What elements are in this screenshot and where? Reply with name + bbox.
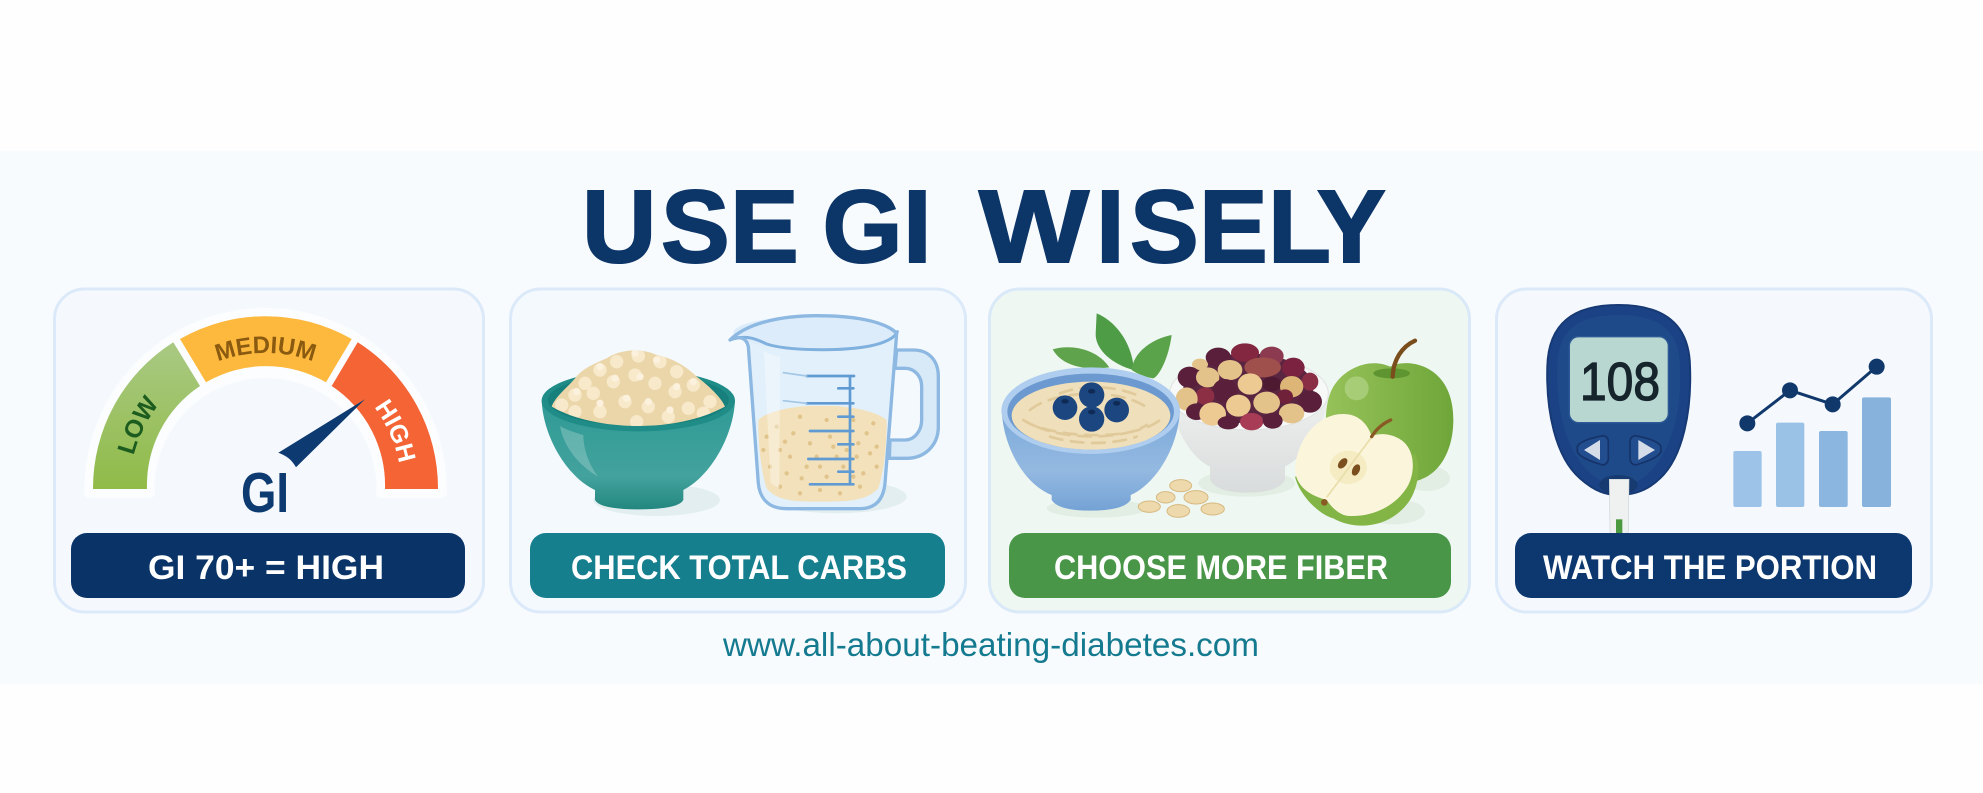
banner: GI 70+ = HIGH: GI 70+ = HIGH	[148, 549, 384, 587]
gauge GI label: GI	[241, 461, 289, 525]
test strip	[1609, 479, 1629, 535]
title: USE GI	[582, 169, 932, 284]
background band	[0, 151, 1983, 684]
banner: GI 70+ = HIGH	[71, 533, 465, 598]
title: ISELY	[1096, 169, 1386, 284]
icon: leaves	[1053, 313, 1172, 378]
banner: check total carbs: CHECK TOTAL CARBS	[571, 549, 907, 587]
meter screen	[1569, 337, 1668, 423]
panel: GI gauge	[53, 288, 485, 614]
panel: more fiber	[990, 289, 1470, 612]
icon: whole green apple	[1326, 341, 1453, 482]
banner: choose more fiber	[1009, 533, 1451, 598]
gauge label: low: LOW	[118, 394, 156, 454]
panel: watch the portion	[1496, 289, 1932, 612]
gauge label: high: HIGH	[375, 398, 416, 462]
gauge segment: low	[93, 342, 200, 489]
banner: check total carbs	[530, 533, 945, 598]
blueberries	[1053, 382, 1129, 432]
banner: choose more fiber: CHOOSE MORE FIBER	[1054, 549, 1388, 587]
illustration: meter and chart	[1547, 305, 1891, 535]
bar chart	[1733, 397, 1891, 507]
illustration: fiber foods	[1001, 313, 1453, 526]
meter buttons	[1577, 436, 1661, 465]
icon: measuring cup	[730, 316, 938, 509]
measuring scale marks	[807, 376, 854, 484]
banner: watch the portion: WATCH THE PORTION	[1543, 549, 1877, 587]
meter screen: 108	[1580, 353, 1660, 412]
icon: oat flakes	[1138, 480, 1224, 517]
footer website url: www.all-about-beating-diabetes.com	[722, 626, 1259, 663]
beans	[1176, 343, 1322, 430]
line chart	[1739, 359, 1885, 431]
gauge chart	[93, 316, 438, 525]
illustration: bowl and measuring cup	[542, 316, 938, 516]
gauge label: medium: MEDIUM	[214, 336, 316, 361]
icon: white bowl of beans	[1170, 343, 1328, 493]
needle	[278, 399, 365, 467]
gauge segment: medium	[180, 316, 352, 382]
title	[582, 169, 1386, 284]
icon: teal bowl of oats	[542, 350, 735, 509]
panel: total carbs	[510, 289, 966, 612]
gauge segment: high	[332, 342, 438, 489]
title: W	[979, 169, 1090, 284]
icon: glucose meter	[1547, 305, 1690, 535]
infographic canvas	[53, 189, 1933, 663]
icon: halved apple	[1295, 414, 1418, 526]
icon: blue bowl of oatmeal with blueberries	[1001, 367, 1180, 511]
banner: watch the portion	[1515, 533, 1912, 598]
